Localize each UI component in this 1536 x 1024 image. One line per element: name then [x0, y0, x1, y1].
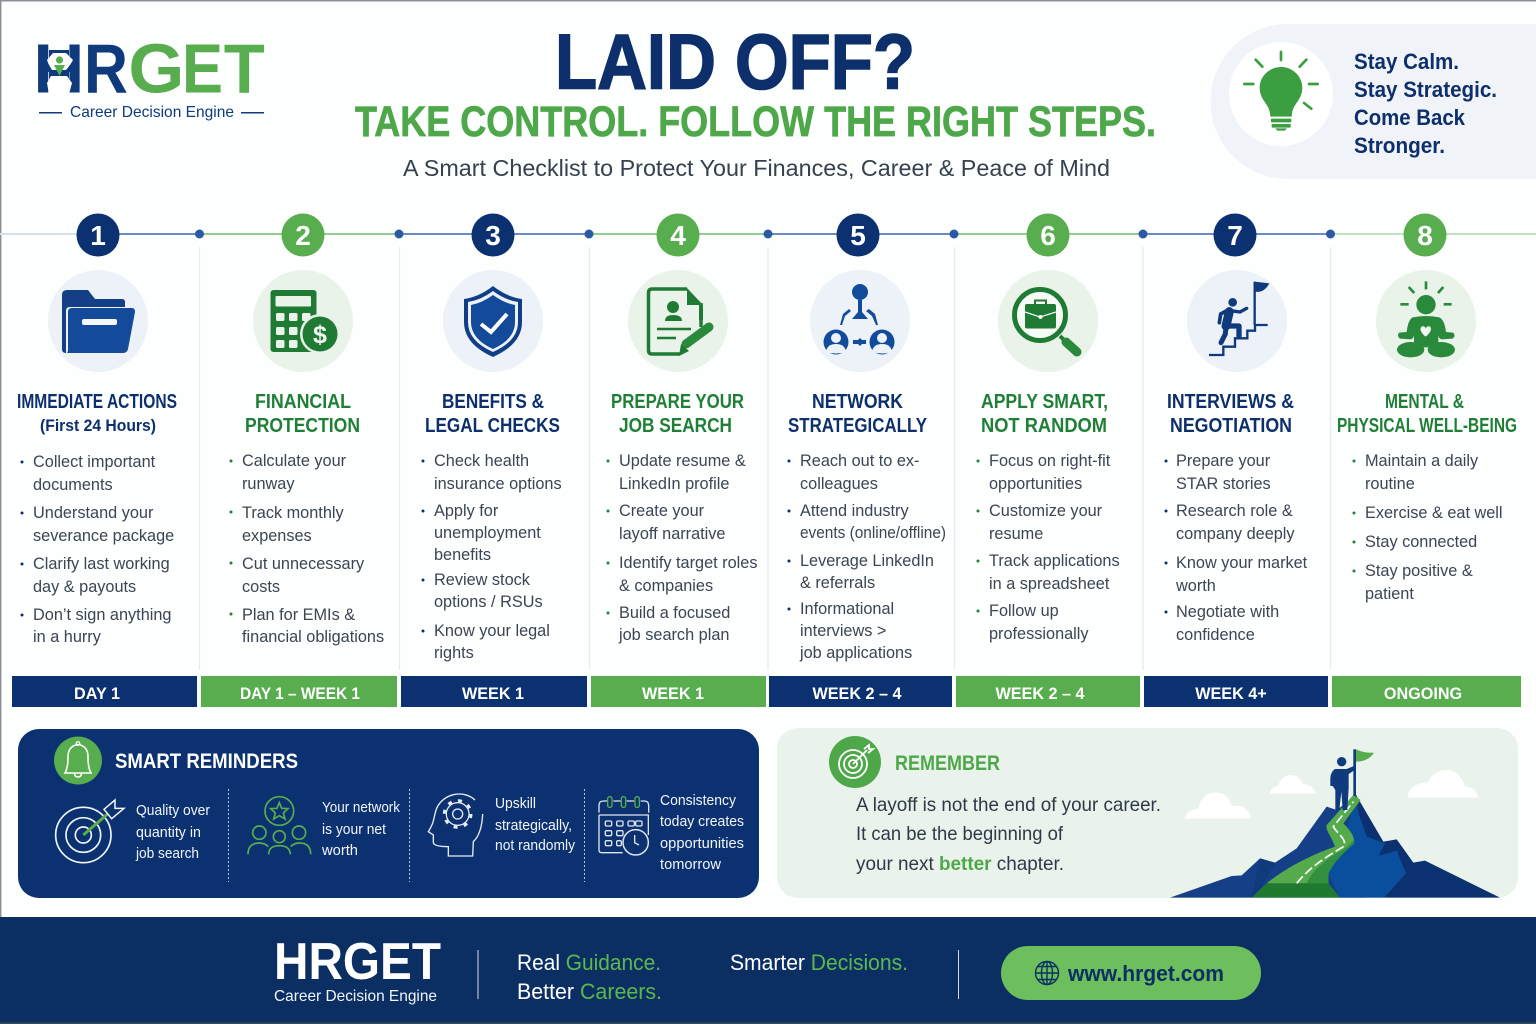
checklist: job search plan [618, 626, 729, 644]
checklist [422, 452, 562, 662]
checklist: Stay positive & [1365, 562, 1473, 580]
step number 2 [282, 214, 324, 256]
icon: head with gear [428, 794, 483, 856]
duration bar [1332, 676, 1521, 707]
reminder: network net worth: worth [321, 842, 358, 859]
cloud [1408, 770, 1478, 798]
heading: APPLY SMART, [981, 390, 1108, 413]
footer tagline: Smarter Decisions. [730, 950, 908, 975]
panel: step 2 financial protection [201, 214, 397, 707]
message: A layoff is not the end of your career. [856, 794, 1161, 816]
checklist: Update resume & [619, 452, 746, 470]
duration bar [12, 676, 197, 707]
step number 4: 4 [670, 220, 686, 251]
checklist: resume [989, 525, 1043, 543]
heading: JOB SEARCH [619, 414, 732, 437]
checklist: in a hurry [33, 628, 102, 646]
logo: HRGET Career Decision Engine: E [182, 30, 223, 108]
heading: REMEMBER [895, 752, 1000, 775]
checklist: Negotiate with [1176, 603, 1279, 621]
message: It can be the beginning of [856, 823, 1064, 845]
checklist: Stay connected [1365, 533, 1477, 551]
logo: HRGET Career Decision Engine: H [33, 30, 84, 108]
footer [0, 917, 1536, 1024]
duration bar [956, 676, 1140, 707]
step number 8 [1404, 214, 1446, 256]
checklist: STAR stories [1176, 475, 1271, 493]
message: your next better chapter. [856, 853, 1064, 875]
logo: HRGET Career Decision Engine: T [224, 30, 265, 108]
checklist: options / RSUs [434, 593, 543, 611]
reminder: network net worth: is your net [322, 821, 387, 838]
heading [425, 390, 560, 437]
duration bar: WEEK 1 [642, 685, 704, 703]
checklist: severance package [33, 527, 174, 545]
reminder: upskill strategically: not randomly [495, 837, 575, 854]
checklist: & companies [619, 577, 713, 595]
reminder: upskill strategically: Upskill [495, 795, 536, 812]
checklist: Collect important [33, 453, 156, 471]
checklist [230, 452, 384, 646]
footer tagline: Real Guidance. [517, 950, 661, 975]
checklist: interviews > [800, 622, 886, 640]
callout: stay calm [1210, 24, 1536, 179]
logo: HRGET Career Decision Engine: G [128, 30, 184, 108]
step number 7: 7 [1227, 220, 1243, 251]
reminder: quality over quantity: Quality over [136, 802, 210, 819]
duration bar: ONGOING [1384, 685, 1462, 703]
icon: resume and pencil [628, 270, 728, 372]
checklist: confidence [1176, 626, 1255, 644]
checklist [1352, 452, 1503, 603]
reminder: network net worth [248, 797, 400, 859]
message [856, 794, 1161, 875]
checklist: Informational [800, 600, 894, 618]
checklist: colleagues [800, 475, 878, 493]
checklist: Identify target roles [619, 554, 757, 572]
heading: IMMEDIATE ACTIONS [17, 390, 177, 413]
checklist: Create your [619, 502, 705, 520]
checklist: Clarify last working [33, 555, 170, 573]
duration bar: WEEK 4+ [1195, 685, 1267, 703]
panel: step 8 well-being [1332, 214, 1521, 707]
logo: HRGET Career Decision Engine: Career Decision Engine [70, 104, 234, 121]
checklist: Build a focused [619, 604, 730, 622]
footer tagline: Better Careers. [517, 979, 662, 1004]
panel: step 1 immediate actions [12, 214, 197, 707]
icon: folder [48, 270, 148, 372]
reminder: quality over quantity: job search [135, 845, 199, 862]
checklist: Review stock [434, 571, 531, 589]
checklist: financial obligations [242, 628, 384, 646]
checklist: costs [242, 578, 280, 596]
icon: magnifier with briefcase [998, 270, 1098, 372]
checklist: Exercise & eat well [1365, 504, 1503, 522]
step number 8: 8 [1417, 220, 1433, 251]
callout: stay calm: Come Back [1354, 105, 1465, 130]
footer logo: HRGET [274, 933, 441, 991]
heading: LEGAL CHECKS [425, 414, 560, 437]
heading: FINANCIAL [255, 390, 351, 413]
logo: HRGET Career Decision Engine: R [84, 30, 128, 108]
icon: climbing stairs to flag [1187, 270, 1287, 372]
checklist: Focus on right-fit [989, 452, 1111, 470]
panel: step 7 interviews [1144, 214, 1328, 707]
checklist: job applications [799, 644, 912, 662]
checklist: Track applications [989, 552, 1120, 570]
heading [1167, 390, 1294, 437]
heading [1337, 390, 1517, 437]
checklist: documents [33, 476, 113, 494]
subtitle: TAKE CONTROL. FOLLOW THE RIGHT STEPS. [355, 98, 1156, 146]
duration bar: DAY 1 – WEEK 1 [240, 685, 360, 703]
reminder: consistency [599, 792, 744, 873]
icon: team with star [248, 797, 311, 854]
checklist: runway [242, 475, 295, 493]
checklist: Follow up [989, 602, 1059, 620]
checklist: & referrals [800, 574, 875, 592]
step number 7 [1214, 214, 1256, 256]
icon: shield [443, 270, 543, 372]
checklist: insurance options [434, 475, 562, 493]
icon: calendar with clock [599, 797, 649, 855]
timeline [0, 230, 1536, 670]
step number 1 [76, 214, 120, 256]
icon: network [810, 270, 910, 372]
website button: www.hrget.com [1067, 961, 1224, 986]
reminder: upskill strategically: strategically, [495, 817, 572, 834]
callout: stay calm: Stay Calm. [1354, 49, 1459, 74]
heading [17, 390, 177, 435]
panel: step 3 benefits and legal [401, 214, 587, 707]
icon: calculator: $ [313, 321, 327, 349]
checklist: in a spreadsheet [989, 575, 1110, 593]
panel: remember [777, 728, 1518, 898]
website button [1001, 946, 1261, 1000]
icon: globe [1036, 962, 1058, 984]
checklist: professionally [989, 625, 1089, 643]
panel: smart reminders [18, 729, 759, 898]
heading: NETWORK [812, 390, 903, 413]
callout: stay calm: Stronger. [1354, 133, 1445, 158]
checklist: unemployment [434, 524, 541, 542]
reminder: quality over quantity [56, 800, 210, 863]
duration bar [1144, 676, 1328, 707]
cloud [1185, 793, 1252, 818]
checklist [606, 452, 757, 644]
climbing path [1267, 795, 1361, 883]
step number 3 [472, 214, 514, 256]
reminder: consistency: opportunities [660, 835, 744, 852]
reminder: consistency: Consistency [660, 792, 736, 809]
checklist [788, 452, 946, 662]
step number 5: 5 [850, 220, 866, 251]
icon: light bulb [1244, 52, 1318, 131]
icon: meditation [1376, 270, 1476, 372]
checklist: worth [1175, 577, 1216, 595]
checklist: Cut unnecessary [242, 555, 365, 573]
heading: PROTECTION [245, 414, 360, 437]
heading [981, 390, 1108, 437]
checklist: events (online/offline) [800, 524, 946, 542]
duration bar: WEEK 2 – 4 [995, 685, 1085, 703]
step number 2: 2 [295, 220, 311, 251]
duration bar [401, 676, 587, 707]
callout: stay calm: Stay Strategic. [1354, 77, 1497, 102]
icon: target and dart [56, 800, 124, 863]
panel: step 5 network [769, 214, 952, 707]
duration bar: WEEK 1 [462, 685, 524, 703]
checklist: company deeply [1176, 525, 1295, 543]
checklist: Check health [434, 452, 529, 470]
checklist: benefits [434, 546, 491, 564]
title: LAID OFF? [555, 18, 915, 106]
reminder: quality over quantity: quantity in [136, 824, 201, 841]
checklist: Know your market [1176, 554, 1308, 572]
person with flag [1330, 749, 1356, 810]
checklist: day & payouts [33, 578, 136, 596]
step number 5 [836, 214, 880, 256]
checklist: Calculate your [242, 452, 347, 470]
checklist: opportunities [989, 475, 1082, 493]
heading: NEGOTIATION [1170, 414, 1292, 437]
checklist: Research role & [1176, 502, 1293, 520]
tagline: A Smart Checklist to Protect Your Finances, Career & Peace of Mind [403, 155, 1110, 181]
heading [245, 390, 360, 437]
checklist: Don’t sign anything [33, 606, 171, 624]
heading: BENEFITS & [442, 390, 544, 413]
checklist: LinkedIn profile [619, 475, 729, 493]
checklist [976, 452, 1120, 643]
step number 4 [656, 214, 700, 256]
heading: PREPARE YOUR [611, 390, 744, 413]
reminder: consistency: tomorrow [660, 856, 721, 873]
checklist: layoff narrative [619, 525, 726, 543]
checklist: Apply for [434, 502, 499, 520]
heading [788, 390, 927, 437]
checklist: Customize your [989, 502, 1103, 520]
checklist: Leverage LinkedIn [800, 552, 934, 570]
checklist: Know your legal [434, 622, 550, 640]
heading: (First 24 Hours) [40, 416, 156, 435]
footer tagline [517, 950, 908, 1004]
duration bar [769, 676, 952, 707]
checklist: expenses [242, 527, 312, 545]
checklist: Plan for EMIs & [242, 606, 355, 624]
step number 6 [1026, 214, 1070, 256]
checklist: routine [1365, 475, 1415, 493]
cloud [1270, 775, 1316, 793]
icon: bell [54, 736, 102, 784]
checklist [20, 453, 174, 646]
duration bar: DAY 1 [74, 685, 120, 703]
reminder: upskill strategically [428, 794, 575, 856]
panel: step 6 apply smart [956, 214, 1140, 707]
logo: HRGET Career Decision Engine [33, 30, 265, 121]
heading [611, 390, 744, 437]
duration bar [591, 676, 766, 707]
checklist: Prepare your [1176, 452, 1271, 470]
duration bar [201, 676, 397, 707]
heading: NOT RANDOM [981, 414, 1107, 437]
checklist [1164, 452, 1308, 644]
icon: calculator [253, 270, 353, 372]
heading: SMART REMINDERS [115, 750, 298, 773]
heading: MENTAL & [1385, 390, 1464, 413]
reminder: consistency: today creates [660, 813, 744, 830]
illustration: mountain with flag [1170, 749, 1500, 898]
step number 6: 6 [1040, 220, 1056, 251]
footer logo: Career Decision Engine [274, 988, 437, 1005]
checklist: Maintain a daily [1365, 452, 1479, 470]
icon: target in green circle [829, 736, 881, 788]
checklist: Understand your [33, 504, 154, 522]
checklist: rights [434, 644, 474, 662]
duration bar: WEEK 2 – 4 [812, 685, 902, 703]
checklist: Track monthly [242, 504, 344, 522]
heading: INTERVIEWS & [1167, 390, 1294, 413]
checklist: Reach out to ex- [800, 452, 919, 470]
step number 3: 3 [485, 220, 501, 251]
checklist: patient [1365, 585, 1414, 603]
panel: step 4 job search [591, 214, 766, 707]
checklist: Attend industry [800, 502, 909, 520]
step number 1: 1 [90, 220, 106, 251]
reminder: network net worth: Your network [322, 799, 400, 816]
heading: STRATEGICALLY [788, 414, 927, 437]
